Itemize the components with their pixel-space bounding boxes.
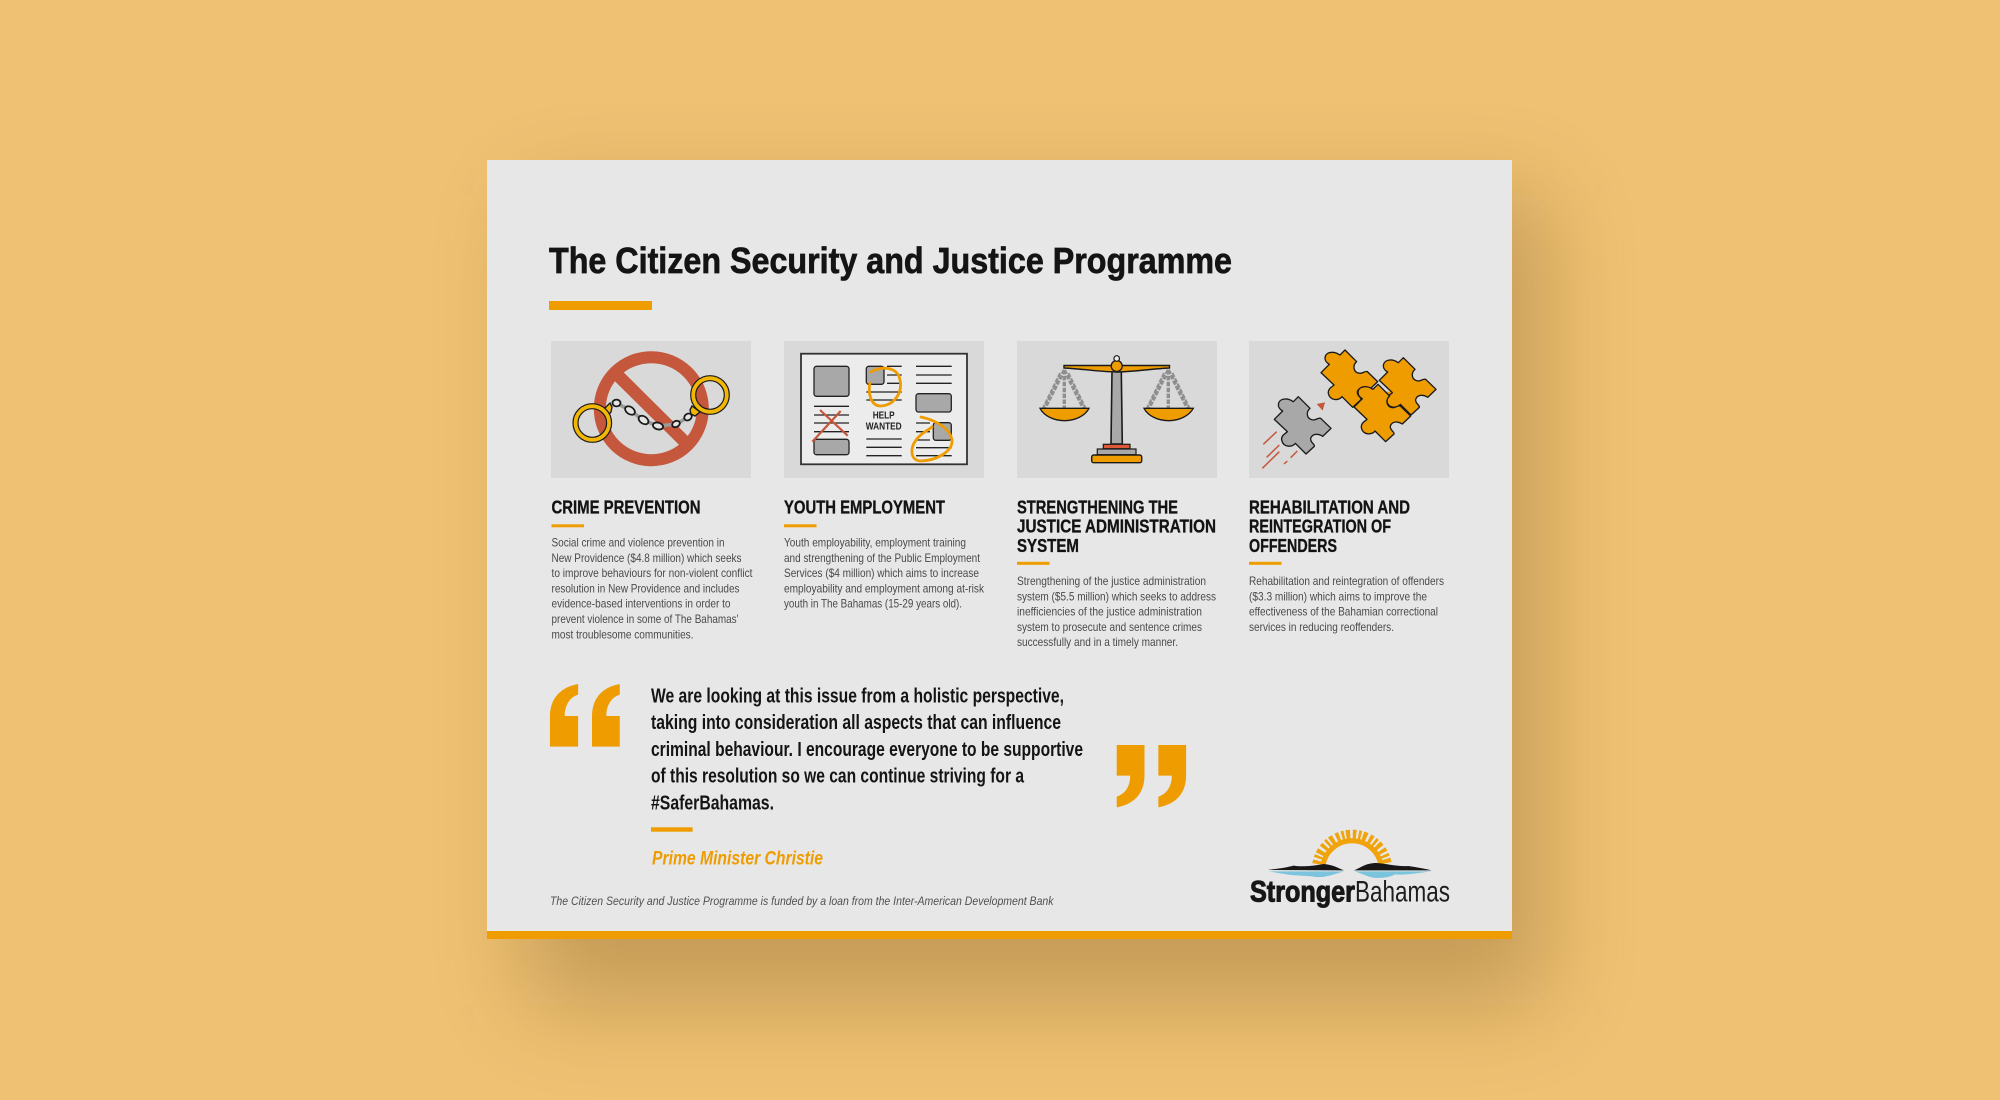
icon: scales of justice — [1017, 341, 1217, 478]
body text: employability and employment among at-risk — [784, 582, 984, 595]
body text: and strengthening of the Public Employment — [784, 552, 981, 565]
bottom accent bar — [487, 931, 1512, 939]
heading rule — [784, 524, 816, 527]
quote attribution: Prime Minister Christie — [652, 848, 823, 870]
heading: YOUTH EMPLOYMENT — [784, 496, 945, 518]
body text: evidence-based interventions in order to — [552, 598, 730, 611]
heading — [1017, 496, 1216, 556]
body text: system ($5.5 million) which seeks to address — [1017, 590, 1216, 603]
body text: most troublesome communities. — [552, 628, 694, 641]
logo wordmark: Stronger — [1250, 876, 1355, 909]
icon: islands and water — [1268, 863, 1432, 878]
icon: handcuffs prohibited — [551, 341, 751, 478]
body text: successfully and in a timely manner. — [1017, 636, 1178, 649]
body text: resolution in New Providence and includes — [552, 582, 740, 595]
body text: to improve behaviours for non-violent conflict — [552, 567, 753, 580]
quote text: of this resolution so we can continue striving for a — [651, 766, 1025, 788]
heading: REHABILITATION AND — [1249, 496, 1410, 518]
panel: poster sheet — [487, 160, 1512, 939]
heading: OFFENDERS — [1249, 535, 1337, 556]
panel: youth employment — [784, 341, 984, 611]
heading: SYSTEM — [1017, 535, 1079, 556]
heading rule — [1017, 562, 1050, 565]
panel: crime prevention — [551, 341, 753, 641]
body text: Social crime and violence prevention in — [552, 536, 724, 550]
logo wordmark — [1250, 876, 1450, 909]
icon: help wanted newspaper: HELP — [873, 411, 895, 422]
icon: rising sun — [1318, 835, 1386, 865]
logo wordmark: Bahamas — [1355, 876, 1450, 909]
heading rule — [1249, 562, 1282, 565]
body text: prevent violence in some of The Bahamas' — [552, 613, 738, 626]
logo: Stronger Bahamas — [1250, 835, 1450, 909]
body text: Rehabilitation and reintegration of offenders — [1249, 575, 1444, 588]
quote text — [651, 685, 1083, 814]
icon: help wanted newspaper — [784, 341, 984, 478]
body text: Youth employability, employment training — [784, 536, 966, 550]
body text: ($3.3 million) which aims to improve the — [1249, 590, 1427, 603]
body text: New Providence ($4.8 million) which seeks — [552, 552, 742, 565]
body text — [1017, 575, 1216, 649]
quote rule — [651, 827, 693, 832]
heading — [1249, 496, 1410, 556]
icon: help wanted newspaper: WANTED — [866, 421, 902, 432]
title underline — [549, 301, 652, 310]
quote text: criminal behaviour. I encourage everyone to be supportive — [651, 739, 1083, 761]
title: The Citizen Security and Justice Programme — [549, 240, 1232, 281]
icon: closing quotation mark — [1117, 745, 1186, 807]
panel: rehabilitation and reintegration — [1249, 341, 1449, 634]
body text: effectiveness of the Bahamian correctional — [1249, 606, 1438, 619]
icon: puzzle pieces — [1249, 341, 1449, 478]
funding note: The Citizen Security and Justice Programme is funded by a loan from the Inter-American Development Bank — [550, 894, 1054, 908]
quote text: #SaferBahamas. — [651, 792, 774, 814]
body text: Services ($4 million) which aims to increase — [784, 567, 979, 580]
body text: youth in The Bahamas (15-29 years old). — [784, 598, 962, 611]
panel: justice administration — [1017, 341, 1217, 649]
body text: inefficiencies of the justice administration — [1017, 606, 1202, 619]
heading: CRIME PREVENTION — [552, 496, 700, 518]
icon: opening quotation mark — [550, 684, 620, 747]
heading: JUSTICE ADMINISTRATION — [1017, 516, 1216, 537]
body text — [784, 536, 984, 611]
heading: REINTEGRATION OF — [1249, 516, 1391, 537]
quote text: taking into consideration all aspects that can influence — [651, 712, 1061, 734]
quote text: We are looking at this issue from a holistic perspective, — [651, 685, 1064, 707]
body text: services in reducing reoffenders. — [1249, 621, 1394, 634]
body text — [552, 536, 753, 641]
body text — [1249, 575, 1444, 634]
heading: STRENGTHENING THE — [1017, 496, 1178, 518]
body text: Strengthening of the justice administration — [1017, 575, 1206, 588]
body text: system to prosecute and sentence crimes — [1017, 621, 1202, 634]
heading rule — [552, 524, 584, 527]
